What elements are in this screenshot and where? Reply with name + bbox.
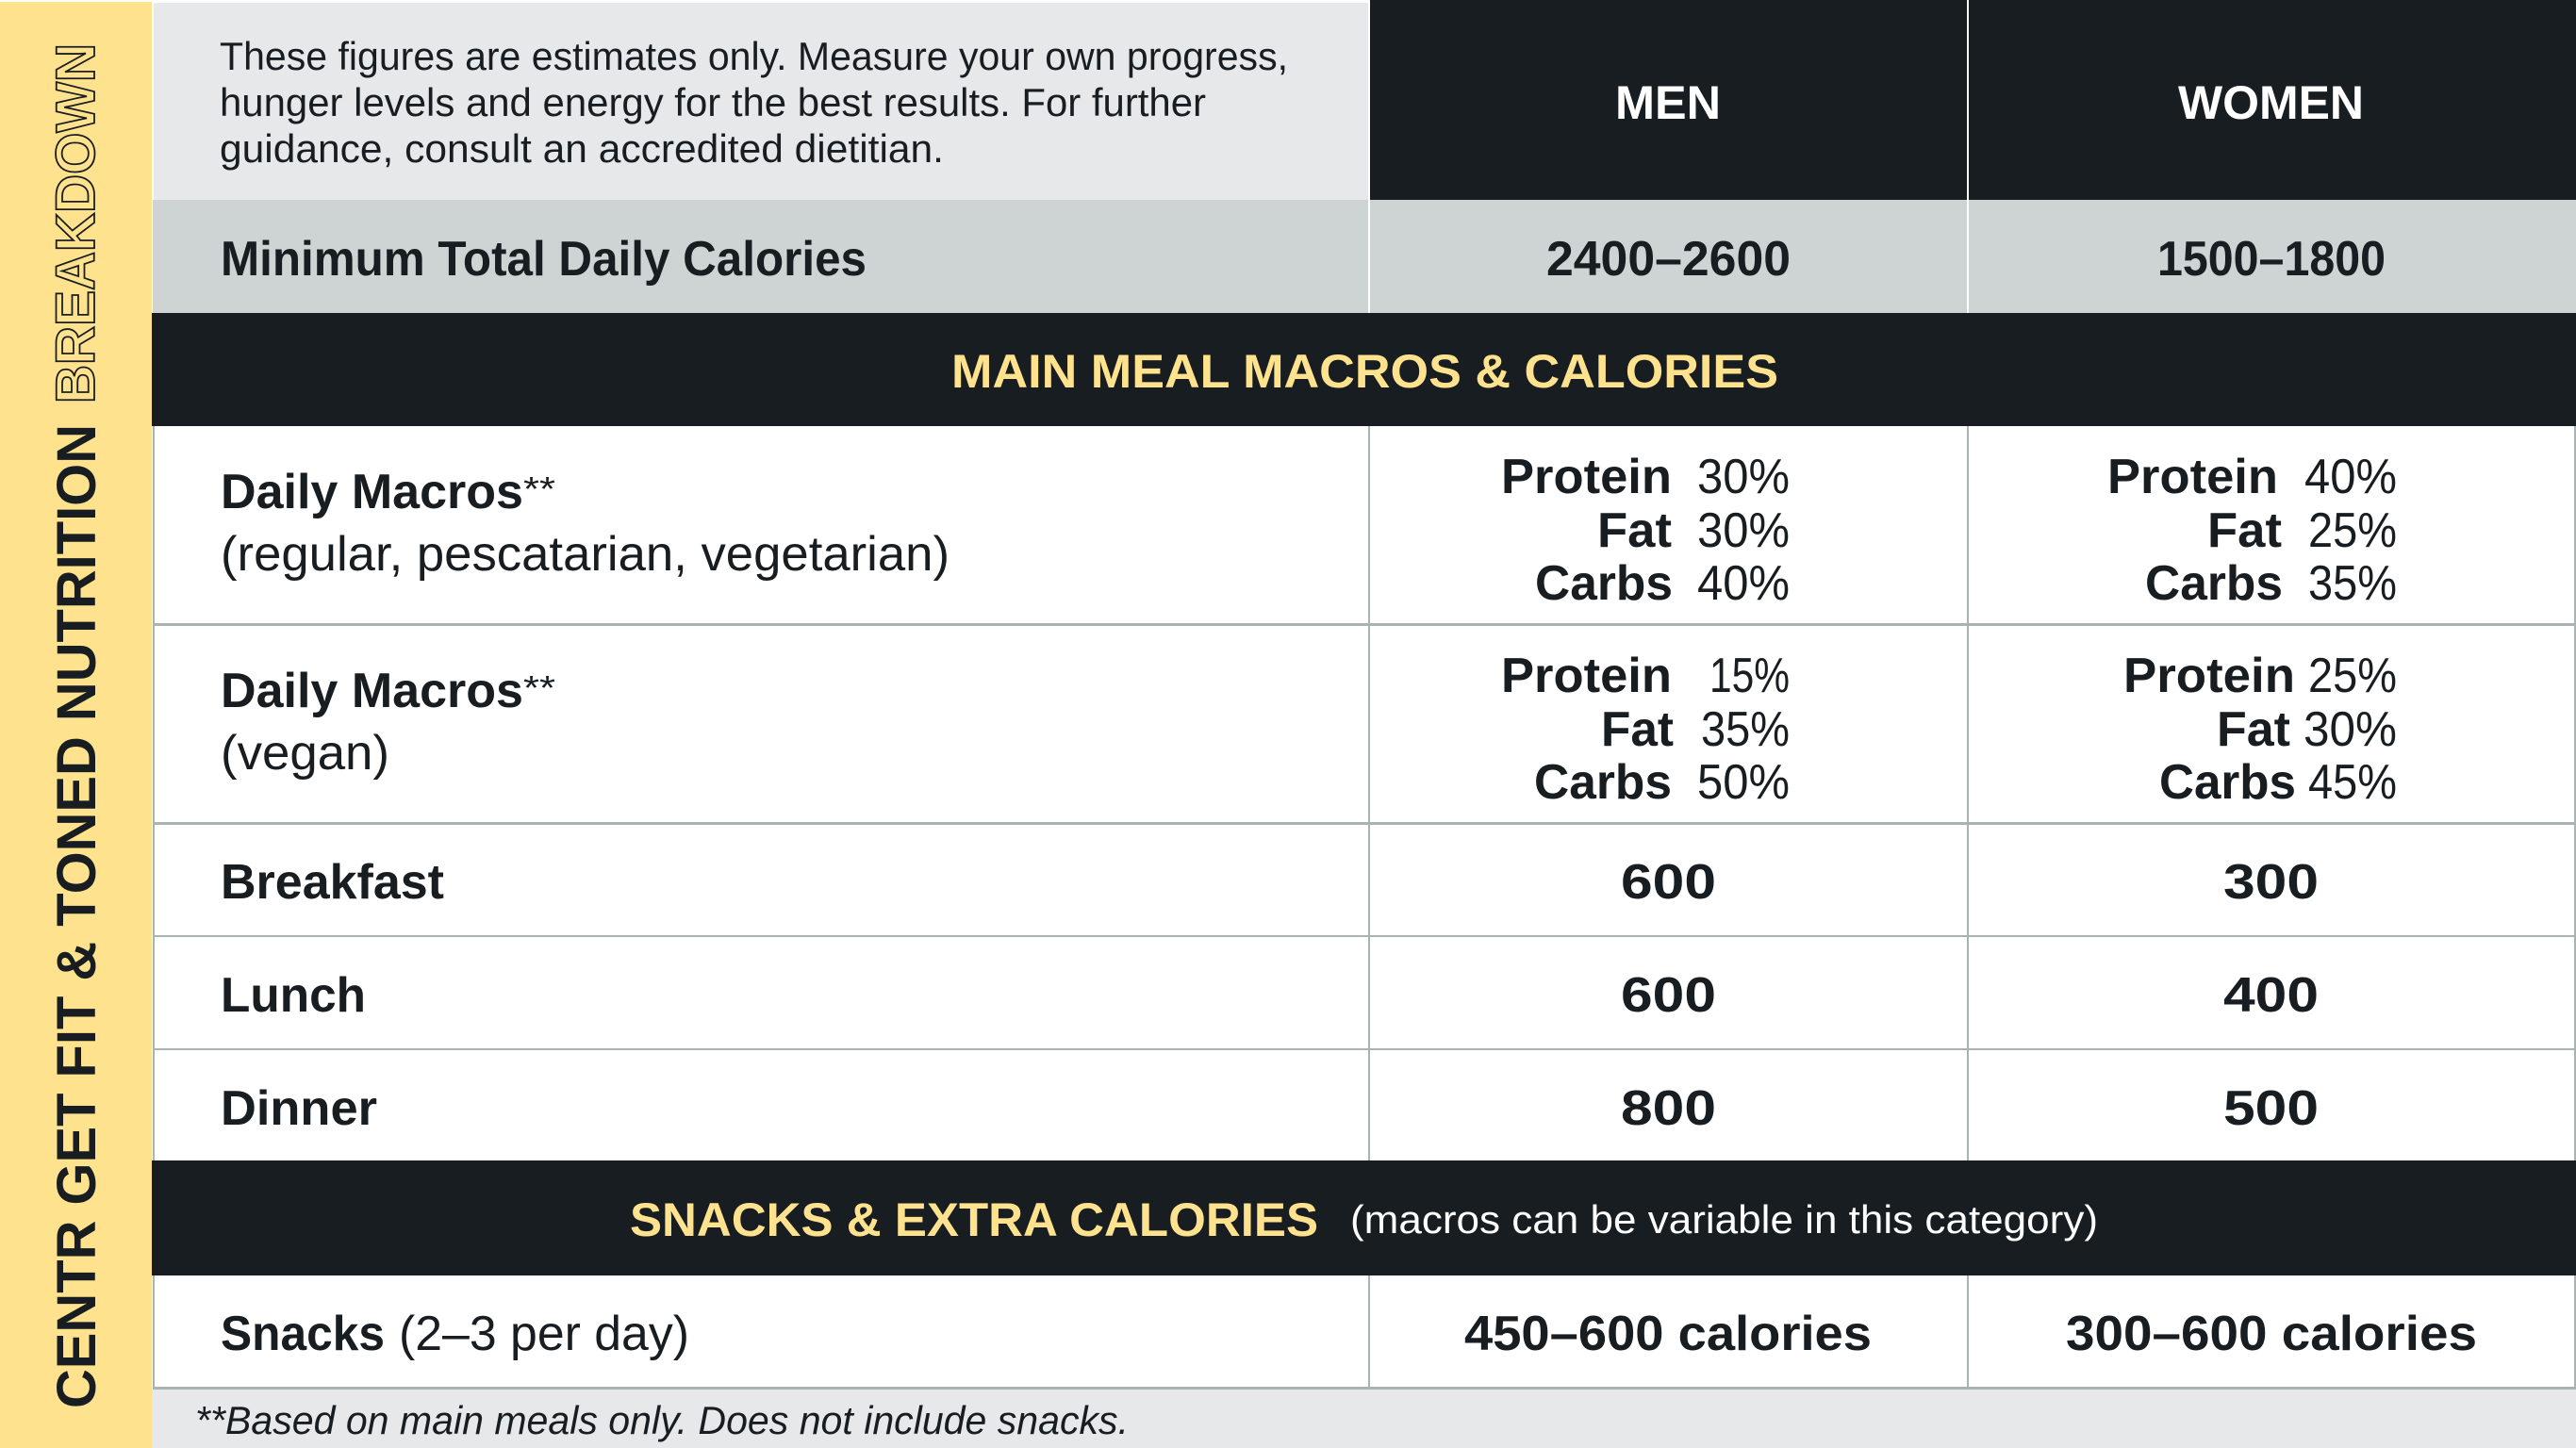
- men macros vegan: Carbs: [1534, 755, 1672, 810]
- row: snacks: (2–3 per day): [399, 1307, 689, 1361]
- women macros vegan: Carbs: [2159, 755, 2296, 810]
- women macros vegan: 30%: [2304, 702, 2397, 757]
- footnote: [152, 1390, 2576, 1448]
- women macros vegan: Protein: [2123, 649, 2295, 703]
- row: breakfast: [221, 855, 2319, 910]
- men macros: 30%: [1697, 503, 1790, 558]
- row: minimum total daily calories: Minimum Total Daily Calories: [221, 232, 867, 287]
- panel: side title bar: [0, 2, 152, 1448]
- men macros: 30%: [1697, 450, 1790, 504]
- section heading: snacks and extra calories: SNACKS & EXTRA CALORIES: [630, 1193, 1318, 1246]
- column header: men: [1370, 0, 1967, 200]
- row: lunch: 400: [2223, 968, 2319, 1023]
- row: breakfast: Breakfast: [221, 855, 444, 910]
- row: daily macros regular: [221, 450, 2397, 611]
- men macros: 40%: [1697, 556, 1790, 611]
- row: daily macros regular: **: [523, 469, 555, 508]
- men macros vegan: Protein: [1501, 649, 1672, 703]
- men macros: Carbs: [1535, 556, 1673, 611]
- row: minimum total daily calories: [153, 200, 2576, 313]
- row: daily macros vegan: Daily Macros: [221, 664, 523, 718]
- row: daily macros regular: (regular, pescatarian, vegetarian): [221, 527, 949, 582]
- women macros: 25%: [2308, 503, 2397, 558]
- row: breakfast: 300: [2223, 855, 2319, 910]
- row: snacks: [221, 1307, 2477, 1361]
- row: lunch: 600: [1621, 968, 1716, 1023]
- men macros vegan: 15%: [1709, 649, 1790, 703]
- women macros: 40%: [2304, 450, 2397, 504]
- disclaimer line 1: These figures are estimates only. Measure your own progress,: [220, 34, 1288, 78]
- row: lunch: [221, 968, 2319, 1023]
- row: snacks: Snacks: [221, 1307, 385, 1361]
- section heading: snacks and extra calories: (macros can be variable in this category): [1350, 1197, 2098, 1242]
- footnote: **Based on main meals only. Does not include snacks.: [195, 1398, 1129, 1442]
- women macros: Fat: [2207, 503, 2282, 558]
- row: dinner: Dinner: [221, 1081, 377, 1136]
- row: snacks: 450–600 calories: [1464, 1307, 1872, 1361]
- row: daily macros regular: Daily Macros: [221, 465, 523, 519]
- row: lunch: Lunch: [221, 968, 366, 1023]
- row: dinner: [221, 1081, 2319, 1136]
- disclaimer line 3: guidance, consult an accredited dietitian.: [220, 126, 944, 171]
- women macros: Protein: [2107, 450, 2278, 504]
- row: breakfast: 600: [1621, 855, 1716, 910]
- row: daily macros vegan: [221, 649, 2397, 810]
- row: dinner: 800: [1621, 1081, 1716, 1136]
- women macros: 35%: [2308, 556, 2397, 611]
- women macros vegan: [2123, 649, 2397, 810]
- disclaimer line 2: hunger levels and energy for the best results. For further: [220, 80, 1206, 124]
- men macros vegan: [1501, 649, 1790, 810]
- section heading: main meal macros and calories: MAIN MEAL MACROS & CALORIES: [951, 345, 1778, 398]
- section heading: main meal macros and calories: [152, 313, 2576, 426]
- panel: disclaimer: [154, 3, 1368, 200]
- row: daily macros vegan: **: [523, 668, 555, 707]
- women macros vegan: 25%: [2308, 649, 2397, 703]
- row: minimum total daily calories: 1500–1800: [2157, 232, 2386, 287]
- column header: men: MEN: [1615, 76, 1721, 129]
- column header: women: [1969, 0, 2576, 200]
- row: dinner: 500: [2223, 1081, 2319, 1136]
- men macros: Protein: [1501, 450, 1672, 504]
- panel: table body rules: [153, 426, 2576, 1390]
- men macros vegan: 50%: [1697, 755, 1790, 810]
- side title: bold: CENTR GET FIT & TONED NUTRITION: [46, 424, 107, 1408]
- women macros: Carbs: [2145, 556, 2283, 611]
- women macros: [2107, 450, 2397, 611]
- row: minimum total daily calories: 2400–2600: [1546, 232, 1791, 287]
- men macros vegan: Fat: [1601, 702, 1674, 757]
- men macros: [1501, 450, 1790, 611]
- men macros vegan: 35%: [1701, 702, 1790, 757]
- row: snacks: 300–600 calories: [2066, 1307, 2477, 1361]
- women macros vegan: 45%: [2308, 755, 2397, 810]
- section heading: snacks and extra calories: [152, 1160, 2576, 1275]
- side title: outline: BREAKDOWN: [45, 43, 107, 403]
- column header: women: WOMEN: [2178, 76, 2364, 129]
- women macros vegan: Fat: [2217, 702, 2290, 757]
- row: daily macros vegan: (vegan): [221, 726, 389, 781]
- men macros: Fat: [1597, 503, 1672, 558]
